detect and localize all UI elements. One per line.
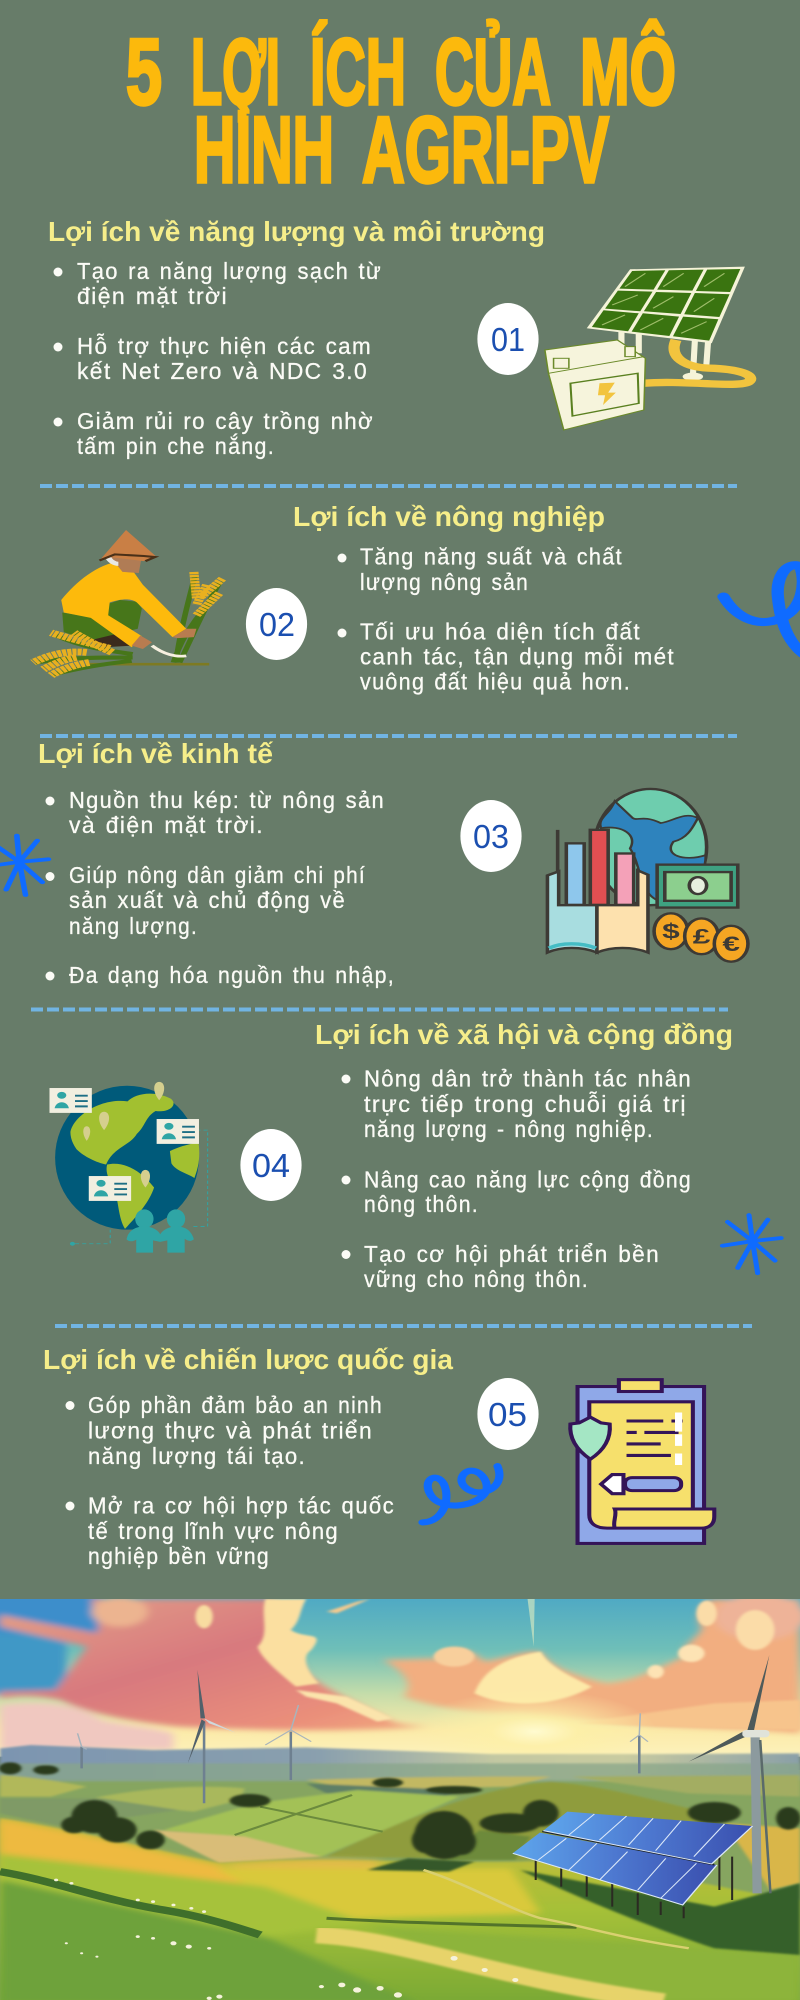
bullet list 5: nghiệp bền vững [88, 1543, 270, 1569]
number badge 05 [477, 1378, 539, 1450]
number badge 02 [246, 588, 307, 660]
bullet list 2: vuông đất hiệu quả hơn. [360, 668, 631, 694]
number badge 04 [240, 1129, 302, 1201]
decoration: blue star right [722, 1215, 781, 1273]
number badge 03: 03 [473, 818, 509, 855]
bullet list 4: trực tiếp trong chuỗi giá trị [364, 1091, 687, 1117]
heading 1: Lợi ích về năng lượng và môi trường [48, 216, 545, 247]
bullet list 3: Nguồn thu kép: từ nông sản [69, 787, 385, 813]
panel: section 4 society and community [49, 1019, 781, 1292]
icon: globe, chart, money and coins: $ [662, 920, 680, 943]
heading 5: Lợi ích về chiến lược quốc gia [43, 1344, 453, 1375]
title: AGRI-PV [362, 97, 609, 202]
bullet list 4: năng lượng - nông nghiệp. [364, 1116, 654, 1142]
bullet list 5 [66, 1392, 395, 1569]
divider 4 [55, 1324, 752, 1328]
bullet list 3: và điện mặt trời. [69, 812, 264, 838]
bullet list 2: Tăng năng suất và chất [360, 544, 623, 570]
number badge 02: 02 [259, 606, 295, 643]
bullet list 4 [342, 1066, 692, 1292]
bullet list 5: tế trong lĩnh vực nông [88, 1518, 339, 1544]
number badge 05: 05 [488, 1396, 527, 1433]
bullet list 3 [46, 787, 395, 988]
bullet list 5: Mở ra cơ hội hợp tác quốc [88, 1492, 395, 1518]
icon: clipboard document with shield and pen [570, 1380, 714, 1543]
decoration: blue squiggle [422, 1466, 499, 1522]
bullet list 3: Đa dạng hóa nguồn thu nhập, [69, 962, 395, 988]
bullet list 2 [338, 544, 675, 694]
icon: globe with people and profiles [49, 1082, 208, 1253]
bullet list 1: Giảm rủi ro cây trồng nhờ [77, 408, 374, 434]
bullet list 4: Nâng cao năng lực cộng đồng [364, 1166, 692, 1192]
bullet list 5: Góp phần đảm bảo an ninh [88, 1392, 383, 1418]
bullet list 4: nông thôn. [364, 1191, 479, 1217]
decoration: blue star left [0, 836, 48, 895]
title: HÌNH [194, 97, 334, 202]
icon: globe, chart, money and coins: £ [693, 925, 710, 948]
bullet list 1 [54, 258, 382, 459]
bullet list 4: vững cho nông thôn. [364, 1266, 589, 1292]
bullet list 3: Giúp nông dân giảm chi phí [69, 862, 366, 888]
icon: globe, chart, money and coins: € [722, 932, 740, 956]
bullet list 2: lượng nông sản [360, 569, 529, 595]
bullet list 1: điện mặt trời [77, 283, 228, 309]
bullet list 3: năng lượng. [69, 913, 198, 939]
title: MÔ [580, 19, 676, 124]
bullet list 1: Hỗ trợ thực hiện các cam [77, 333, 372, 359]
number badge 01 [477, 303, 539, 375]
panel: section 2 agriculture [33, 501, 800, 694]
illustration: landscape with wind turbines and solar panels [0, 1590, 800, 2000]
divider 3 [31, 1008, 728, 1012]
title: CỦA [435, 19, 551, 124]
bullet list 2: canh tác, tận dụng mỗi mét [360, 644, 675, 670]
number badge 03 [460, 800, 522, 872]
icon: solar panel and battery [545, 267, 751, 430]
bullet list 5: năng lượng tái tạo. [88, 1443, 306, 1469]
bullet list 1: Tạo ra năng lượng sạch từ [77, 258, 382, 284]
title: 5 [126, 19, 162, 124]
bullet list 5: lương thực và phát triển [88, 1418, 373, 1444]
title: ÍCH [310, 19, 406, 124]
icon: farmer harvesting rice [33, 530, 222, 675]
heading 4: Lợi ích về xã hội và cộng đồng [315, 1019, 733, 1050]
bullet list 1: tấm pin che nắng. [77, 433, 275, 459]
icon: globe, chart, money and coins [547, 789, 748, 962]
bullet list 3: sản xuất và chủ động về [69, 887, 346, 913]
title: LỢI [191, 19, 280, 124]
heading 2: Lợi ích về nông nghiệp [293, 501, 605, 532]
heading 3: Lợi ích về kinh tế [38, 738, 273, 769]
panel: section 3 economy [0, 738, 748, 988]
bullet list 2: Tối ưu hóa diện tích đất [360, 618, 641, 644]
divider 2 [40, 734, 737, 738]
bullet list 1: kết Net Zero và NDC 3.0 [77, 358, 368, 384]
number badge 04: 04 [252, 1147, 290, 1184]
decoration: blue squiggle right [723, 565, 800, 654]
divider 1 [40, 484, 737, 488]
bullet list 4: Tạo cơ hội phát triển bền [364, 1241, 660, 1267]
bullet list 4: Nông dân trở thành tác nhân [364, 1066, 692, 1092]
panel: section 5 national strategy [43, 1344, 714, 1569]
title [126, 19, 676, 202]
panel: section 1 energy and environment [48, 216, 751, 459]
number badge 01: 01 [491, 321, 525, 358]
